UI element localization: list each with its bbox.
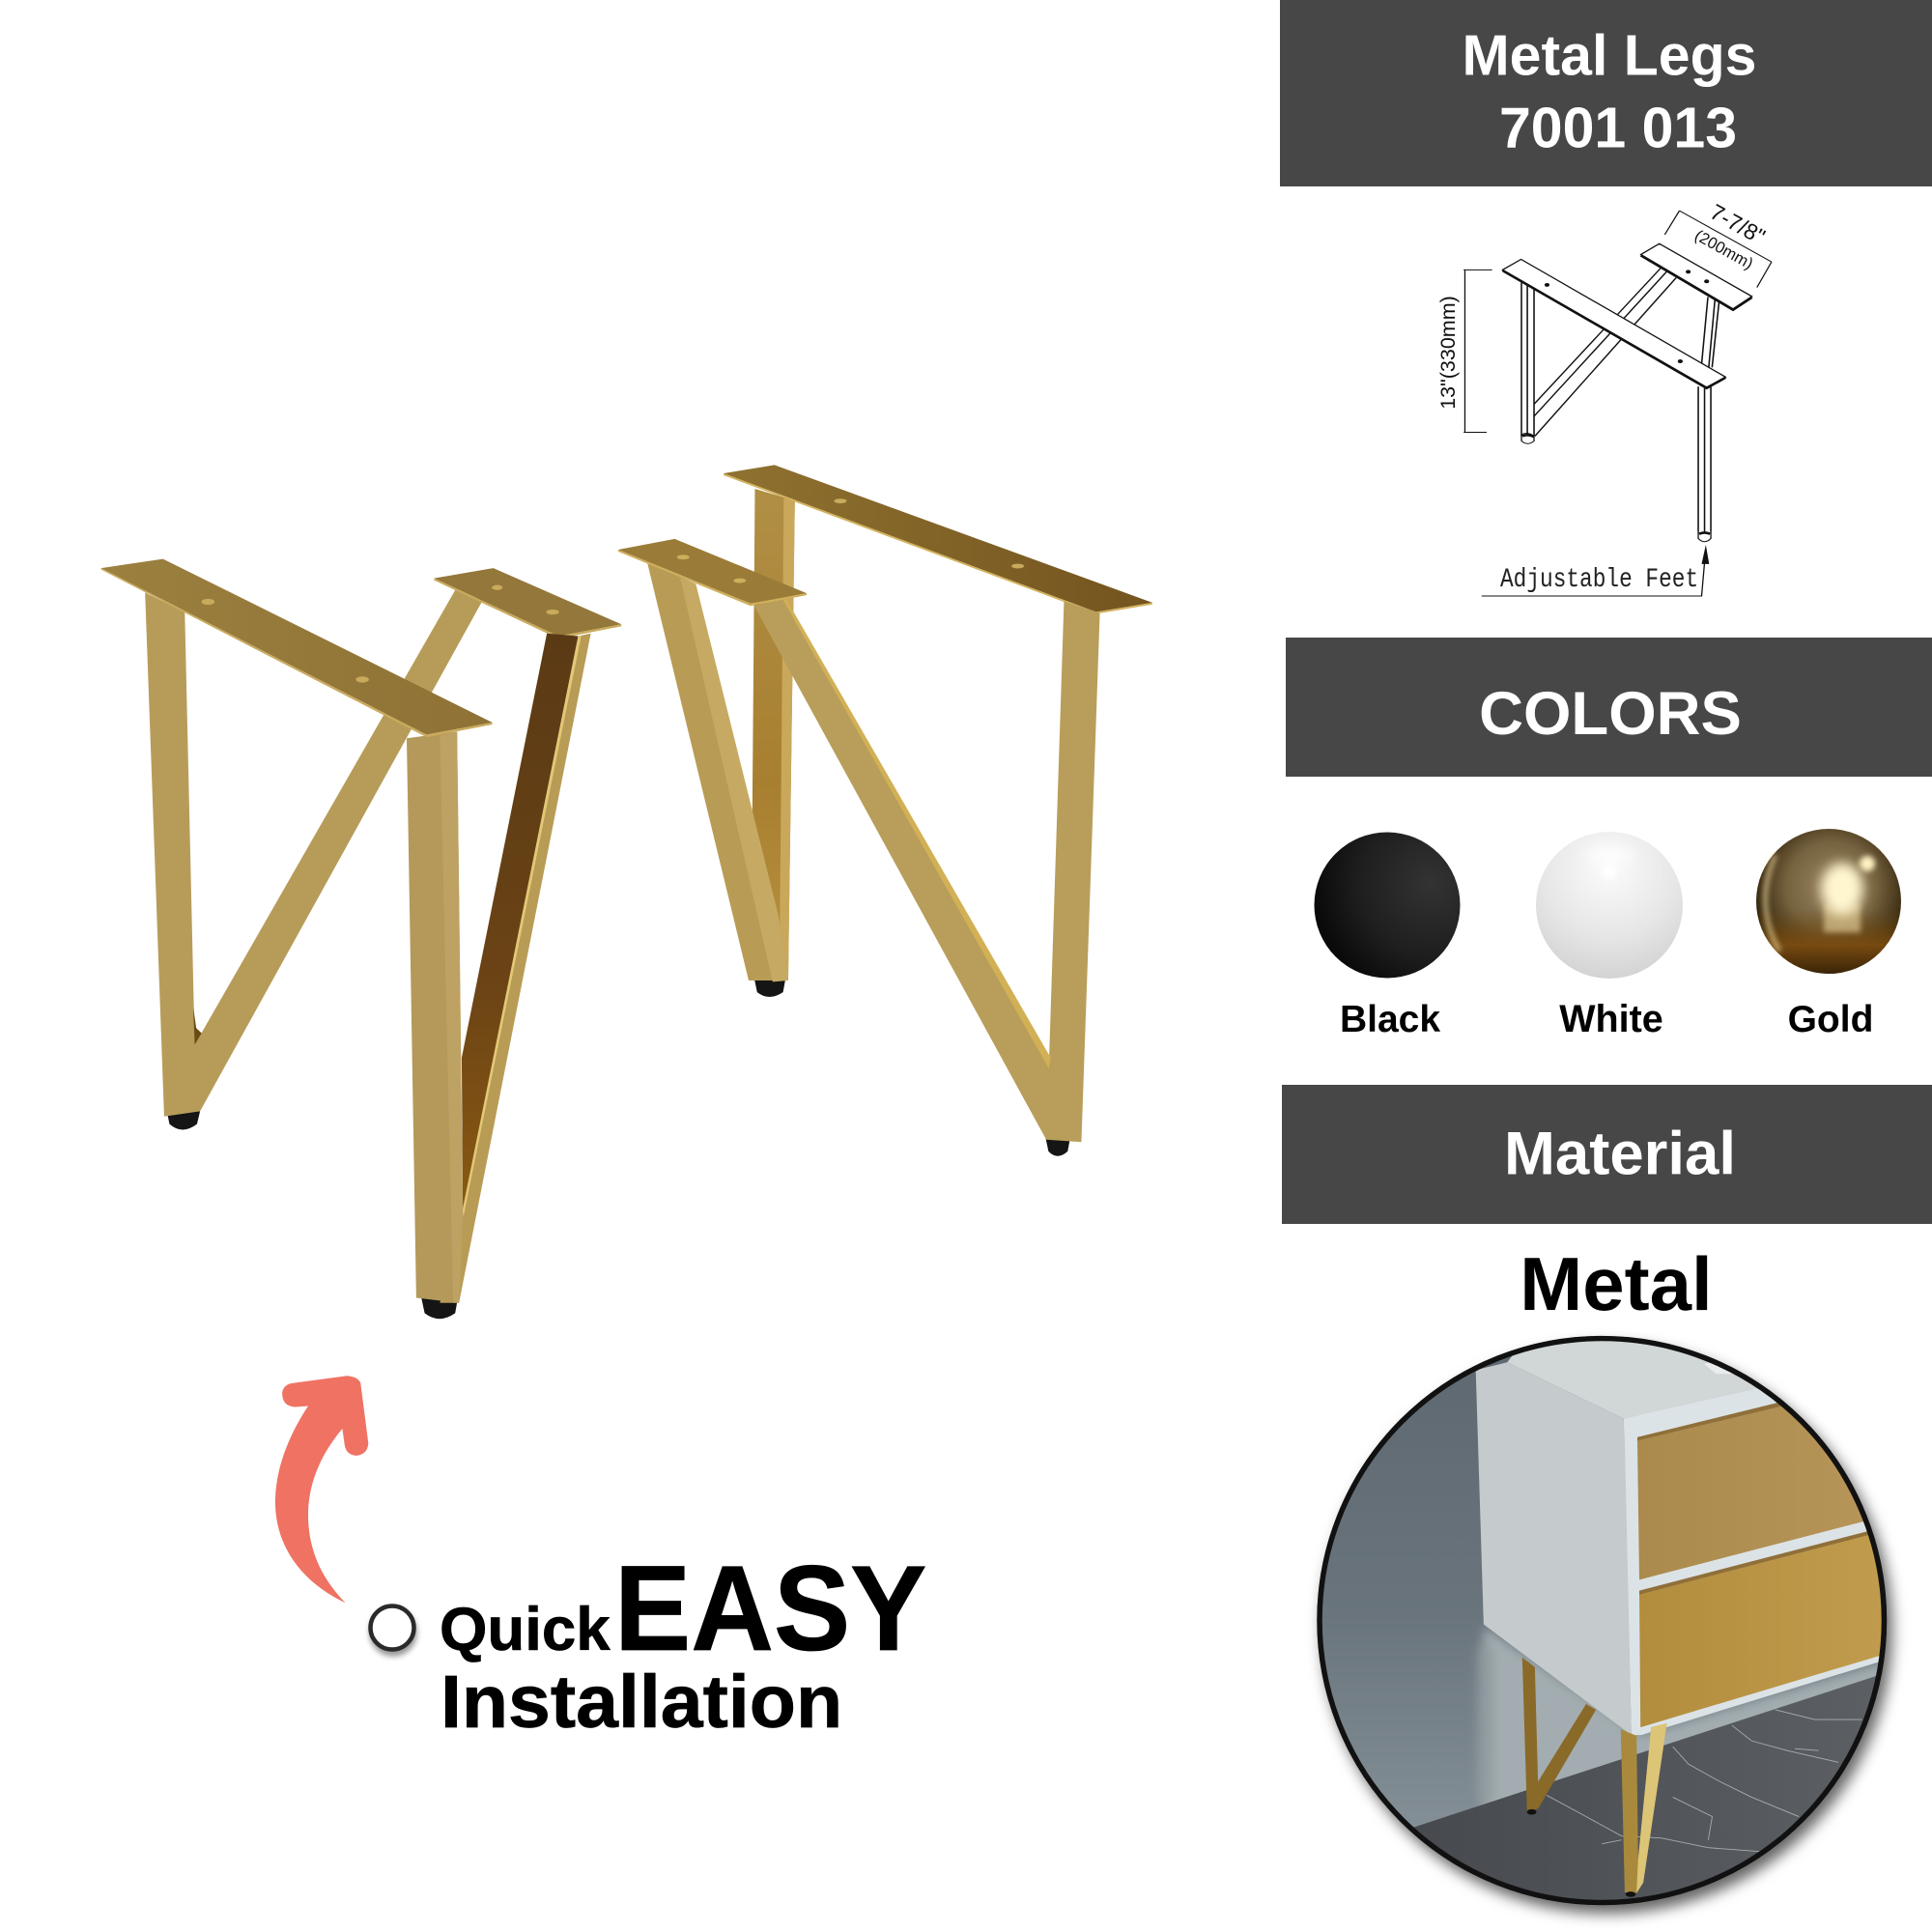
upper gold drawer bbox=[1636, 1406, 1863, 1580]
floor veins bbox=[1547, 1710, 1862, 1852]
inner dark brown face bbox=[462, 634, 579, 1213]
swatch: white bbox=[1536, 832, 1683, 1040]
text: Installation: Installation bbox=[440, 1660, 842, 1744]
long diagonal and right post bbox=[754, 599, 1100, 1142]
marble floor bbox=[1414, 1676, 1876, 1900]
sink cutout at top bbox=[1704, 1362, 1733, 1374]
V leg with diagonal brace bbox=[145, 590, 483, 1117]
height dimension lines bbox=[1463, 270, 1492, 433]
foot: left leg bbox=[167, 1111, 200, 1129]
short plate bbox=[1641, 243, 1752, 309]
lower gold drawer bbox=[1639, 1525, 1893, 1727]
front gold leg bbox=[1621, 1723, 1667, 1893]
rear gold leg bbox=[1522, 1658, 1596, 1811]
swatch: black bbox=[1314, 833, 1461, 1040]
dimension: height: 13"(330mm) bbox=[1436, 296, 1460, 410]
rear vertical post bbox=[753, 489, 795, 980]
right foot bbox=[1698, 532, 1711, 542]
long front plate bbox=[101, 559, 493, 737]
arrow: coral curved arrow bbox=[275, 1376, 368, 1603]
cabinet top bbox=[1507, 1341, 1758, 1418]
front right leg lines bbox=[1698, 385, 1711, 532]
left foot bbox=[1521, 434, 1534, 443]
header bar: Material: Material bbox=[1504, 1121, 1736, 1188]
text: EASY: EASY bbox=[614, 1541, 926, 1676]
foot: front leg bbox=[421, 1295, 458, 1319]
short slanted leg bbox=[647, 561, 788, 980]
icon: round bullet ring bbox=[371, 1605, 413, 1650]
swatch: gold bbox=[1756, 829, 1901, 1040]
circular photo: metal cabinet detail bbox=[1294, 1323, 1925, 1914]
dark inner shade at V bbox=[193, 1007, 202, 1045]
header bar: Material bbox=[1282, 1085, 1932, 1224]
cabinet side panel bbox=[1476, 1362, 1632, 1735]
swatch: gold: Gold bbox=[1788, 999, 1873, 1040]
long plate bbox=[1502, 259, 1725, 387]
technical drawing with dimensions bbox=[1436, 199, 1772, 596]
label: adjustable feet: Adjustable Feet bbox=[1500, 564, 1698, 595]
back short plate bbox=[434, 568, 621, 639]
header bar: Metal Legs 7001 013: 7001 013 bbox=[1499, 97, 1737, 160]
left leg lines bbox=[1521, 283, 1534, 436]
swatch: white: White bbox=[1559, 998, 1663, 1040]
text: Quick: Quick bbox=[440, 1596, 611, 1663]
foot: rear leg bbox=[754, 979, 785, 997]
photo black ring bbox=[1320, 1339, 1884, 1902]
text: Quick EASY Installation bbox=[440, 1541, 926, 1744]
short front plate bbox=[618, 539, 807, 606]
width dimension lines bbox=[1664, 211, 1772, 288]
dimension: width mm: (200mm) bbox=[1691, 227, 1756, 273]
rear right leg lines bbox=[1702, 298, 1719, 367]
header bar: COLORS bbox=[1286, 638, 1932, 777]
cabinet front frame bbox=[1624, 1376, 1893, 1735]
wall bbox=[1321, 1356, 1878, 1828]
header bar: Metal Legs 7001 013: Metal Legs bbox=[1463, 23, 1756, 87]
foot: long leg bbox=[1045, 1137, 1070, 1156]
dimension: width inches: 7-7/8" bbox=[1706, 199, 1770, 249]
photo contents bbox=[1321, 1341, 1882, 1900]
header bar: COLORS: COLORS bbox=[1479, 680, 1742, 748]
line drawing of leg pair bbox=[1463, 211, 1772, 596]
front vertical post bbox=[407, 731, 463, 1303]
photo frame bbox=[1320, 1339, 1884, 1902]
lit wall patch under cabinet bbox=[1484, 1627, 1886, 1817]
mounting holes bbox=[1545, 270, 1709, 363]
swatch: black: Black bbox=[1340, 999, 1440, 1040]
slanted gold band bbox=[440, 634, 591, 1303]
adjustable feet leader bbox=[1482, 557, 1705, 596]
brace lines bbox=[1534, 269, 1676, 436]
reflection of leg on wall bbox=[1480, 1646, 1492, 1801]
right pair of gold metal legs bbox=[618, 465, 1152, 1156]
long rear plate bbox=[724, 465, 1152, 613]
header bar: Metal Legs 7001 013 bbox=[1280, 0, 1932, 186]
heading: Metal: Metal bbox=[1520, 1241, 1713, 1326]
left pair of gold metal legs bbox=[101, 559, 621, 1319]
